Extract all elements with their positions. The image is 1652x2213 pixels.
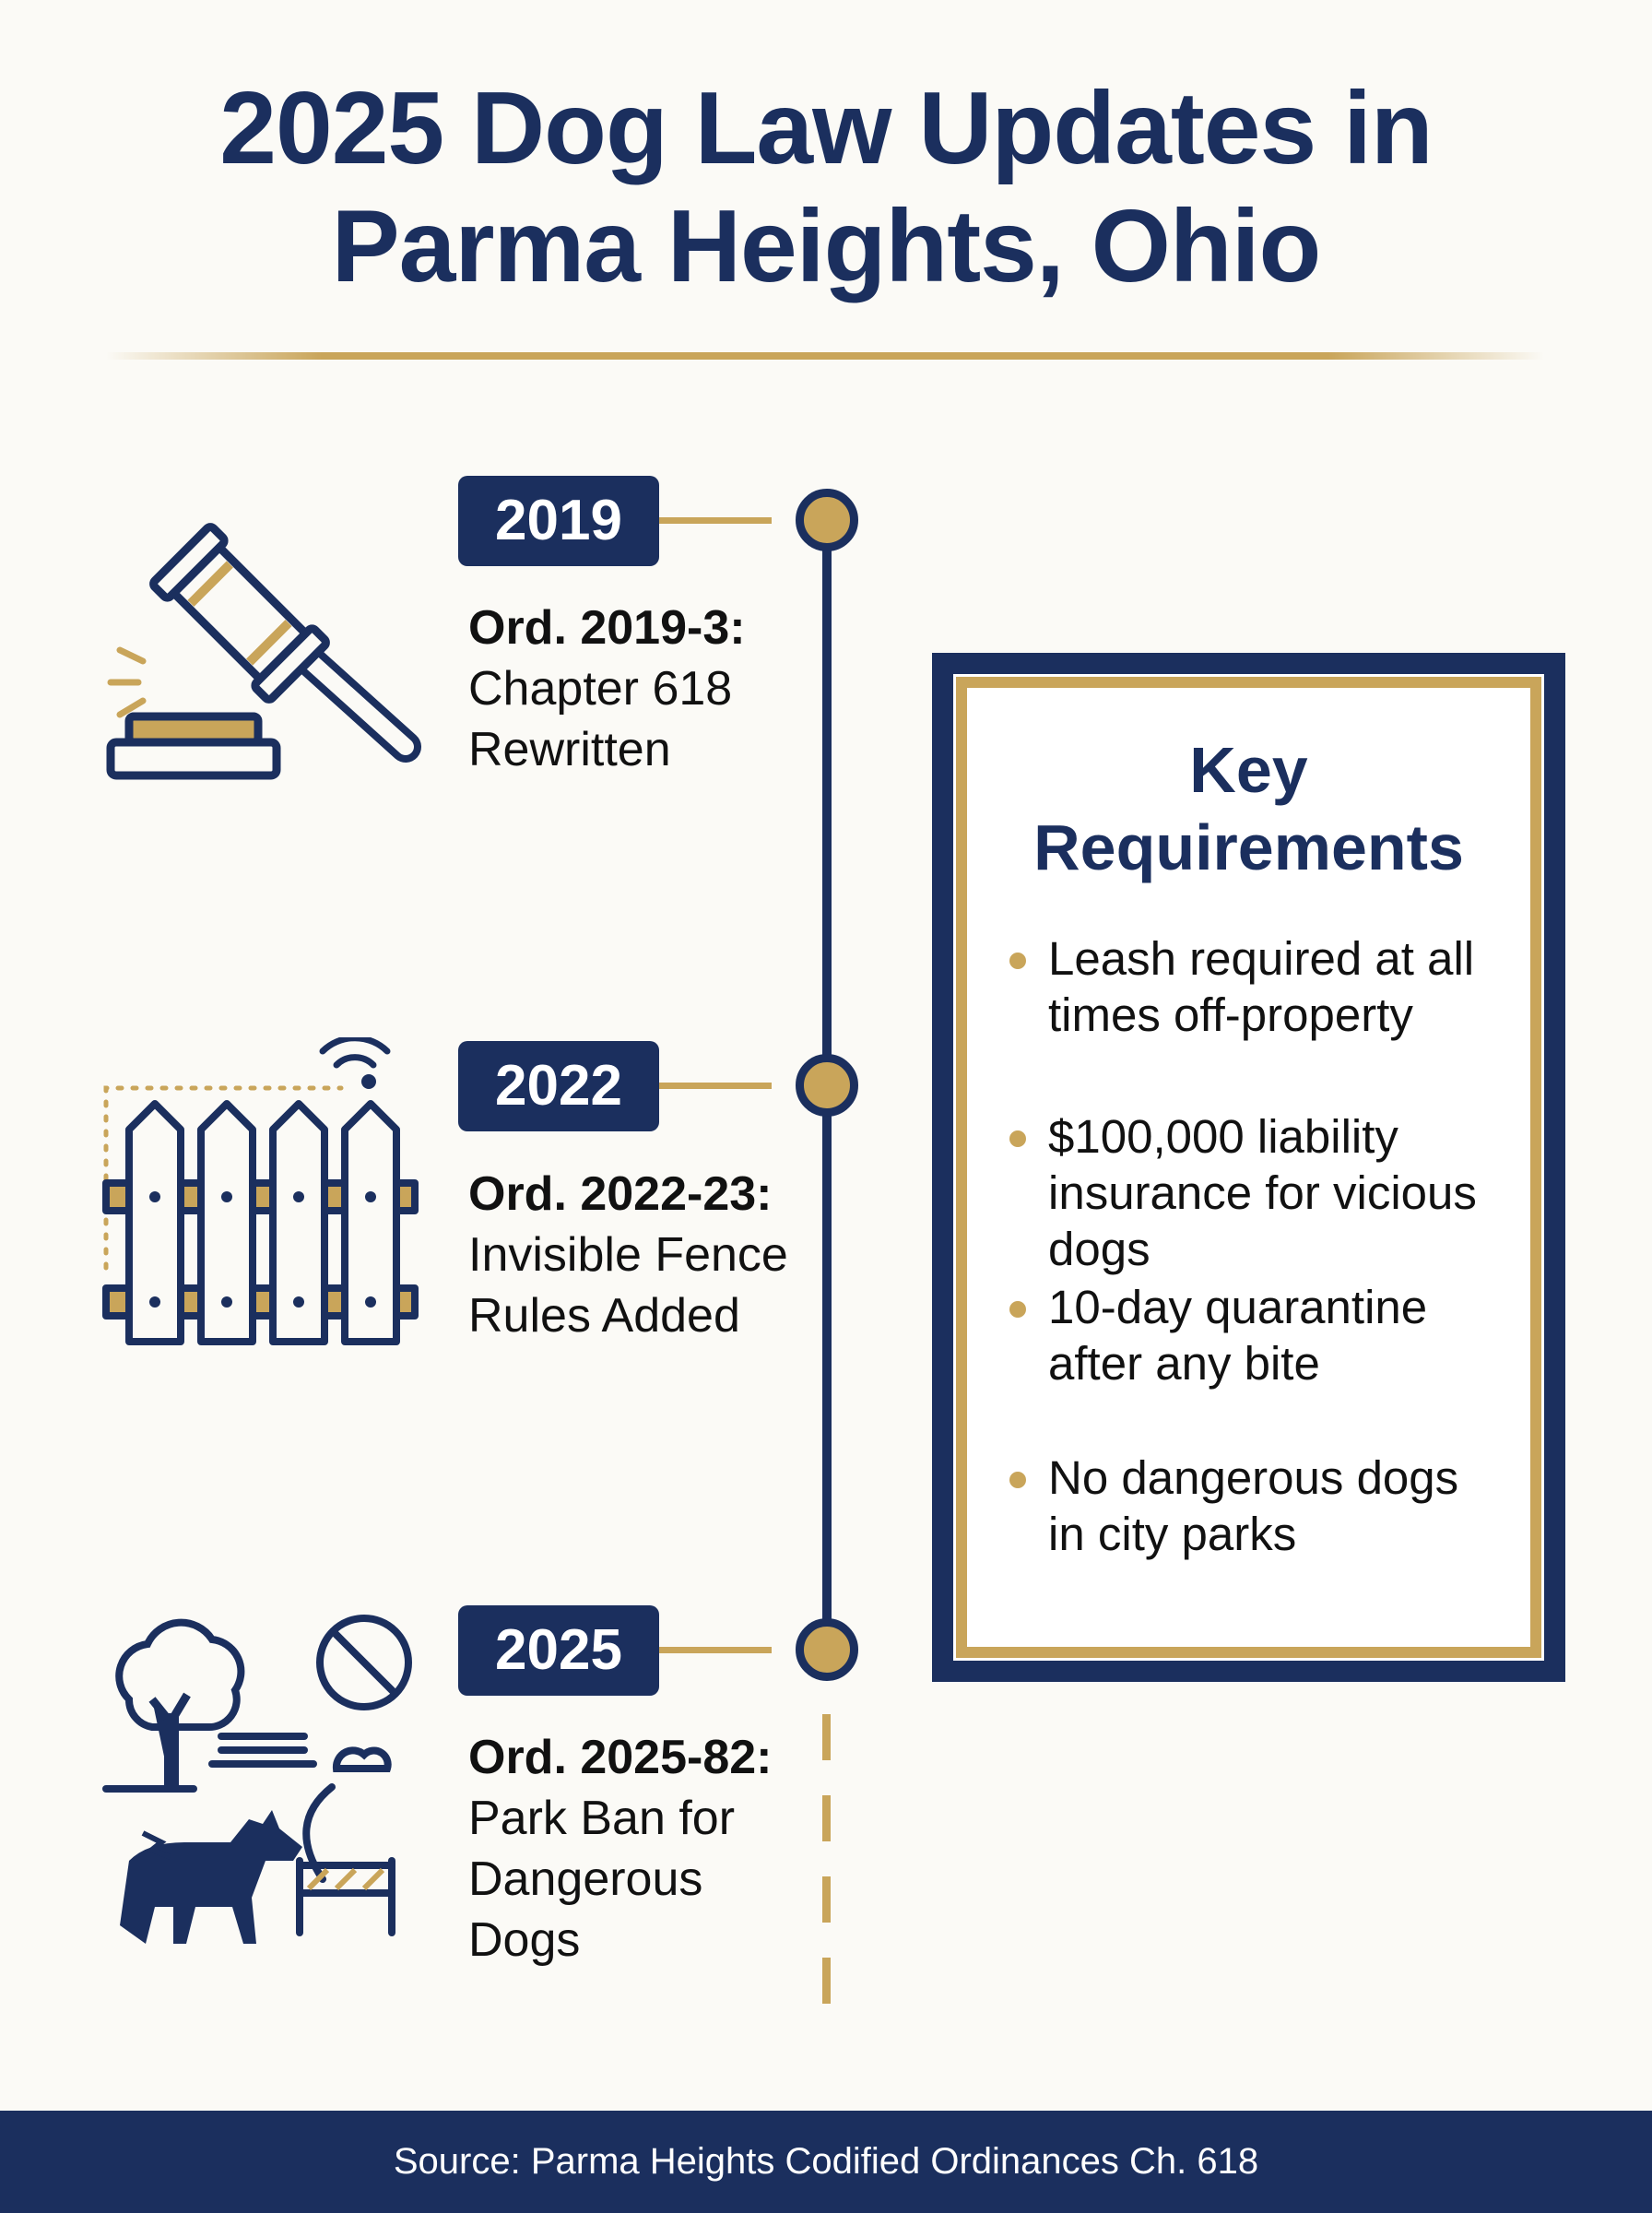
badge 2025: 2025: [495, 1618, 622, 1682]
dot 2025: [796, 1618, 858, 1681]
text 2025: Dogs: [468, 1913, 580, 1967]
footer: Source: Parma Heights Codified Ordinances Ch. 618: [394, 2141, 1258, 2182]
badge 2022: [458, 1041, 659, 1131]
text 2019: Ord. 2019-3:: [468, 601, 746, 655]
badge 2019: 2019: [495, 489, 622, 552]
text 2025: Ord. 2025-82:: [468, 1731, 773, 1784]
title: 2025 Dog Law Updates in: [219, 71, 1433, 185]
timeline dashed extension: [822, 1714, 831, 2009]
bullet: parks: No dangerous dogs in city parks: [1048, 1451, 1458, 1560]
panel: key requirements: [932, 653, 1565, 1682]
badge 2022: 2022: [495, 1054, 622, 1118]
text 2022: [468, 1167, 788, 1343]
dot 2019: [796, 489, 858, 551]
text 2019: Chapter 618: [468, 662, 732, 716]
panel heading: [1033, 734, 1464, 883]
text 2019: [468, 601, 746, 776]
title: Parma Heights, Ohio: [332, 189, 1320, 303]
badge 2025: [458, 1605, 659, 1696]
title: [219, 71, 1433, 303]
panel heading: Requirements: [1033, 811, 1464, 883]
text 2025: [468, 1731, 773, 1967]
bullet: leash: Leash required at all times off-property: [1048, 932, 1474, 1041]
panel heading: Key: [1189, 734, 1308, 806]
text 2025: Park Ban for: [468, 1792, 735, 1845]
bullet: quarantine: 10-day quarantine after any bite: [1048, 1281, 1427, 1390]
text 2022: Ord. 2022-23:: [468, 1167, 773, 1221]
bullet: insurance: $100,000 liability insurance for vicious dogs: [1048, 1110, 1477, 1275]
text 2025: Dangerous: [468, 1852, 702, 1906]
timeline line: [822, 519, 832, 1651]
dot 2022: [796, 1054, 858, 1117]
text 2022: Rules Added: [468, 1289, 740, 1343]
icon: fence: [102, 1037, 419, 1345]
icon: park ban: [102, 1615, 412, 1944]
text 2019: Rewritten: [468, 723, 671, 776]
badge 2019: [458, 476, 659, 566]
icon: gavel: [107, 523, 421, 780]
footer: [0, 2111, 1652, 2213]
text 2022: Invisible Fence: [468, 1228, 788, 1282]
